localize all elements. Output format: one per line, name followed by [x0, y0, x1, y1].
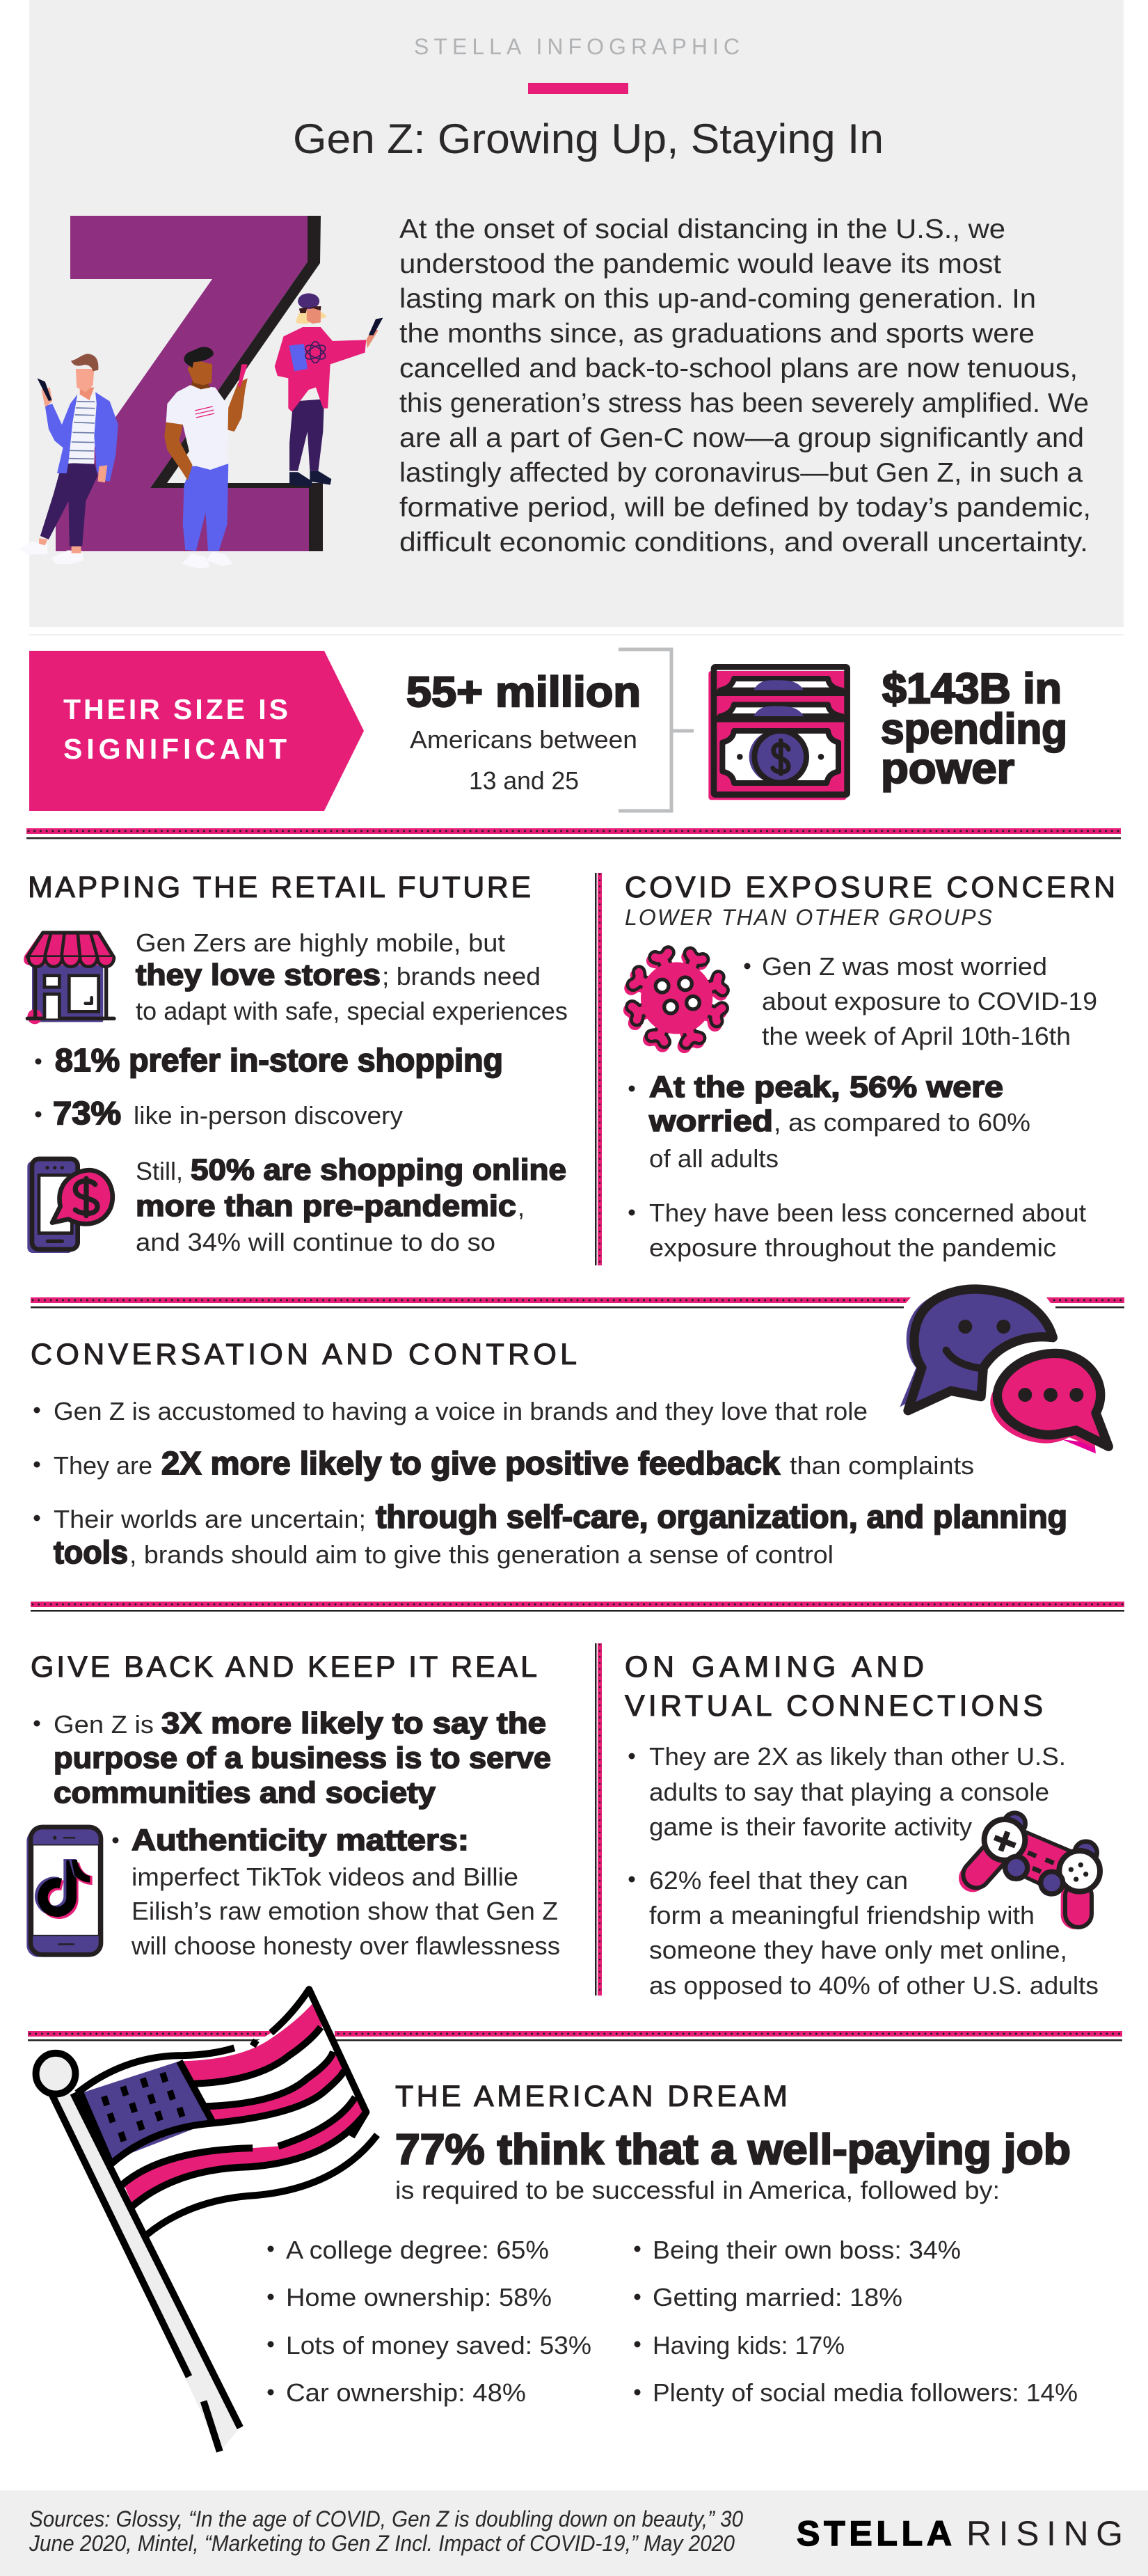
- icon: american flag: [36, 1989, 377, 2451]
- text: they love stores: to adapt with safe, special experiences: [136, 997, 568, 1025]
- panel: the american dream: [267, 2080, 1078, 2407]
- bullet: positive feedback: 2X more likely to give positive feedback: [161, 1445, 780, 1481]
- intro paragraph: this generation’s stress has been severely amplified. We: [399, 388, 1089, 418]
- bullet: online friendship: 62% feel that they can: [649, 1866, 908, 1895]
- heading: ON GAMING AND: [625, 1650, 924, 1684]
- stat: $143B spending power: [881, 665, 1067, 792]
- bullet: sense of control: through self-care, organization, and planning: [376, 1499, 1067, 1535]
- bullet: sense of control: Their worlds are uncertain;: [54, 1505, 366, 1533]
- bullet: 3X more likely: 3X more likely to say the: [161, 1707, 546, 1740]
- intro paragraph: formative period, will be defined by today’s pandemic,: [399, 493, 1091, 523]
- bullet: positive feedback: than complaints: [790, 1451, 974, 1480]
- bullet: console games: [629, 1742, 1066, 1841]
- text: they love stores: [136, 929, 568, 1025]
- heading: MAPPING THE RETAIL FUTURE: [28, 871, 531, 904]
- panel: gaming and virtual connections: [625, 1650, 1100, 2000]
- stat: 55+ million: [406, 668, 641, 795]
- bullet: console games: adults to say that playing a console: [649, 1778, 1049, 1806]
- panel: their size is significant: [29, 649, 1067, 811]
- bullet: at the peak: worried: [648, 1105, 773, 1138]
- logo: Stella Rising: RISING: [966, 2514, 1123, 2553]
- bullet: authenticity matters: will choose honesty over flawlessness: [131, 1931, 560, 1960]
- stat: $143B spending power: power: [881, 745, 1014, 792]
- text: shopping online: [136, 1153, 566, 1256]
- illustration: letter Z with three young people: [19, 216, 383, 569]
- bullet: voice in brands: Gen Z is accustomed to having a voice in brands and they love that role: [54, 1397, 868, 1425]
- bullet: authenticity matters: Authenticity matters:: [131, 1824, 469, 1857]
- bullet: 3X more likely: purpose of a business is to serve: [54, 1741, 551, 1775]
- bullet: 81% prefer in-store: 81% prefer in-store shopping: [55, 1042, 503, 1078]
- key stat: 77%: 77% think that a well-paying job: [395, 2126, 1071, 2173]
- bullet: 73% in-person discovery: 73%: [53, 1095, 121, 1131]
- panel: covid exposure concern: [625, 871, 1115, 1262]
- list: right column: Being their own boss: 34%: [653, 2236, 961, 2264]
- subheading: LOWER THAN OTHER GROUPS: [625, 905, 992, 930]
- sources: [29, 2506, 743, 2556]
- bullet: less concerned: [629, 1199, 1086, 1262]
- bullet: 3X more likely: [33, 1707, 551, 1810]
- heading: CONVERSATION AND CONTROL: [31, 1338, 577, 1371]
- text: shopping online: 50% are shopping online: [191, 1153, 566, 1187]
- panel: give back and keep it real: [26, 1650, 560, 1960]
- letter Z: [56, 216, 323, 551]
- intro paragraph: cancelled and back-to-school plans are now tenuous,: [399, 354, 1078, 384]
- list: right column: [635, 2236, 1078, 2407]
- person: woman in pink top: [275, 293, 383, 487]
- heading: COVID EXPOSURE CONCERN: [625, 871, 1115, 904]
- bullet: most worried week: Gen Z was most worried: [762, 952, 1047, 981]
- bullet: console games: game is their favorite activity: [649, 1812, 972, 1841]
- sources: June 2020, Mintel, “Marketing to Gen Z Incl. Impact of COVID-19,” May 2020: [29, 2531, 735, 2556]
- list: left column: A college degree: 65%: [286, 2236, 549, 2264]
- bullet: authenticity matters: Eilish’s raw emotion show that Gen Z: [131, 1897, 558, 1925]
- intro paragraph: lastingly affected by coronavirus—but Gen Z, in such a: [399, 458, 1083, 488]
- icon: stack of money: [708, 667, 847, 800]
- list: right column: Having kids: 17%: [653, 2331, 845, 2360]
- eyebrow label: STELLA INFOGRAPHIC: [414, 34, 740, 59]
- arrow banner: SIGNIFICANT: [63, 733, 287, 765]
- bracket connector: [619, 649, 694, 811]
- icon: storefront: [24, 933, 114, 1024]
- bullet: less concerned: exposure throughout the pandemic: [649, 1233, 1056, 1262]
- person: man in white t-shirt: [164, 347, 248, 569]
- list: right column: Getting married: 18%: [653, 2283, 902, 2312]
- text: they love stores: they love stores: [136, 958, 381, 992]
- icon: game controller: [973, 1813, 1100, 1915]
- list: left column: Car ownership: 48%: [286, 2378, 526, 2407]
- title: Gen Z: Growing Up, Staying In: [293, 116, 884, 162]
- icon: phone with dollar bubble: [27, 1159, 113, 1253]
- footer: [0, 2490, 1148, 2576]
- text: they love stores: ; brands need: [382, 962, 541, 990]
- bullet: online friendship: form a meaningful friendship with: [649, 1901, 1035, 1929]
- stat: 55+ million: 13 and 25: [469, 766, 579, 795]
- bullet: most worried week: about exposure to COVID-19: [762, 987, 1097, 1016]
- icon: virus: [630, 953, 723, 1046]
- panel: header and intro: [19, 0, 1124, 635]
- bullet: authenticity matters: imperfect TikTok videos and Billie: [131, 1863, 518, 1891]
- intro paragraph: [399, 214, 1091, 558]
- heading: THE AMERICAN DREAM: [395, 2080, 788, 2113]
- text: shopping online: and 34% will continue to do so: [136, 1228, 495, 1256]
- bullet: most worried week: [744, 952, 1097, 1050]
- subtext: is required to be successful in America, followed by:: [395, 2176, 1000, 2204]
- text: shopping online: more than pre-pandemic: [136, 1190, 516, 1223]
- bullet: sense of control: [33, 1499, 1067, 1570]
- bullet: 3X more likely: Gen Z is: [54, 1710, 154, 1739]
- bullet: most worried week: the week of April 10th-16th: [762, 1022, 1071, 1050]
- bullet: at the peak: At the peak, 56% were: [649, 1070, 1003, 1104]
- arrow banner: [29, 651, 364, 811]
- person: man with jacket: [19, 354, 118, 564]
- panel: mapping the retail future: [24, 871, 568, 1256]
- icon: chat bubbles: [900, 1287, 1108, 1453]
- text: shopping online: Still,: [136, 1157, 183, 1185]
- bullet: online friendship: [629, 1866, 1099, 2000]
- text: shopping online: ,: [518, 1193, 525, 1222]
- bullet: 73% in-person discovery: like in-person discovery: [134, 1101, 403, 1130]
- stat: $143B spending power: spending: [881, 705, 1067, 752]
- intro paragraph: At the onset of social distancing in the U.S., we: [399, 214, 1005, 244]
- list: left column: Home ownership: 58%: [286, 2283, 552, 2312]
- list: right column: Plenty of social media followers: 14%: [653, 2378, 1078, 2407]
- bullet: sense of control: tools: [54, 1534, 128, 1570]
- heading: [625, 1650, 1043, 1723]
- bullet: online friendship: as opposed to 40% of other U.S. adults: [649, 1971, 1099, 2000]
- accent bar: [528, 83, 628, 94]
- icon: phone with TikTok logo: [26, 1827, 101, 1957]
- text: they love stores: Gen Zers are highly mobile, but: [136, 929, 505, 957]
- bullet: authenticity matters: [113, 1824, 560, 1960]
- bullet: online friendship: someone they have only met online,: [649, 1936, 1067, 1964]
- bullet: 3X more likely: communities and society: [54, 1776, 436, 1810]
- bullet: console games: They are 2X as likely than other U.S.: [649, 1742, 1066, 1771]
- panel: conversation and control: [31, 1287, 1108, 1570]
- bullet: sense of control: , brands should aim to give this generation a sense of control: [129, 1540, 834, 1569]
- intro paragraph: difficult economic conditions, and overall uncertainty.: [399, 528, 1088, 558]
- arrow banner: THEIR SIZE IS: [63, 693, 288, 725]
- heading: VIRTUAL CONNECTIONS: [625, 1689, 1043, 1723]
- people: [19, 293, 383, 569]
- intro paragraph: the months since, as graduations and sports were: [399, 319, 1035, 349]
- logo: Stella Rising: STELLA: [797, 2514, 952, 2553]
- bullet: less concerned: They have been less concerned about: [649, 1199, 1086, 1227]
- sources: Sources: Glossy, “In the age of COVID, Gen Z is doubling down on beauty,” 30: [29, 2506, 743, 2531]
- intro paragraph: understood the pandemic would leave its most: [399, 249, 1001, 279]
- intro paragraph: lasting mark on this up-and-coming generation. In: [399, 284, 1036, 314]
- bullet: 73% in-person discovery: [35, 1095, 403, 1131]
- bullet: positive feedback: [33, 1445, 974, 1481]
- list: left column: Lots of money saved: 53%: [286, 2331, 591, 2360]
- bullet: at the peak: , as compared to 60%: [774, 1108, 1030, 1137]
- list: left column: [267, 2236, 591, 2407]
- stat: 55+ million: 55+ million: [406, 668, 641, 716]
- stat: 55+ million: Americans between: [410, 725, 637, 754]
- heading: GIVE BACK AND KEEP IT REAL: [31, 1650, 537, 1684]
- logo: Stella Rising: [797, 2514, 1123, 2553]
- intro paragraph: are all a part of Gen-C now—a group significantly and: [399, 423, 1084, 453]
- bullet: at the peak: of all adults: [649, 1144, 779, 1173]
- bullet: positive feedback: They are: [54, 1451, 152, 1480]
- bullet: at the peak: [629, 1070, 1030, 1173]
- stat: $143B spending power: $143B in: [882, 665, 1062, 712]
